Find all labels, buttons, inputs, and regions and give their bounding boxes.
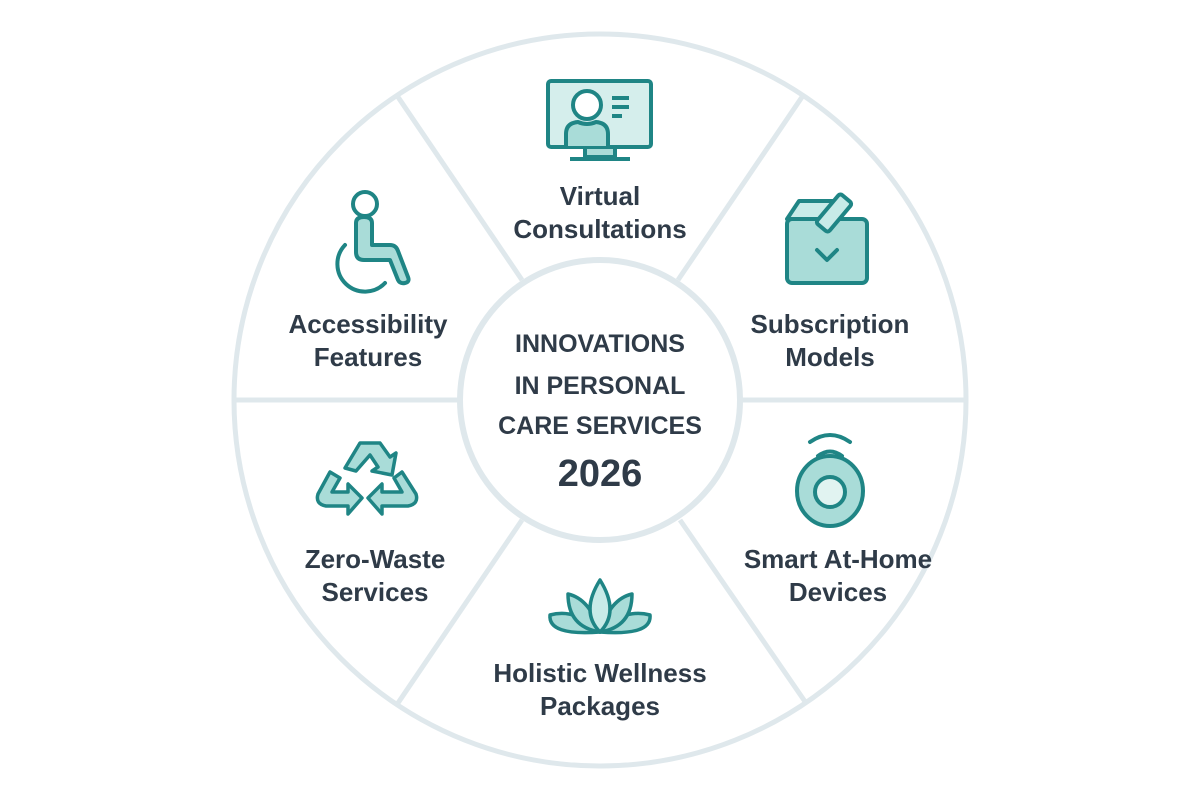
- icon: subscription box: [787, 193, 867, 283]
- icon: monitor: [548, 81, 651, 159]
- center hub: IN PERSONAL: [515, 372, 685, 400]
- label: Accessibility Features: [289, 309, 448, 372]
- center hub: 2026: [558, 453, 642, 495]
- label: Holistic Wellness Packages: Packages: [540, 691, 660, 721]
- label: Virtual Consultations: Virtual: [560, 181, 640, 211]
- label: Subscription Models: Models: [785, 342, 875, 372]
- label: Subscription Models: [751, 309, 909, 372]
- label: Smart At-Home Devices: Smart At-Home: [744, 544, 932, 574]
- center hub: [460, 260, 740, 540]
- label: Holistic Wellness Packages: Holistic Wellness: [493, 658, 707, 688]
- center hub: INNOVATIONS: [515, 330, 685, 358]
- label: Zero-Waste Services: Services: [322, 577, 428, 607]
- label: Zero-Waste Services: [305, 544, 445, 607]
- label: Zero-Waste Services: Zero-Waste: [305, 544, 445, 574]
- icon: wheelchair: [337, 192, 409, 292]
- label: Virtual Consultations: Consultations: [513, 214, 687, 244]
- label: Accessibility Features: Accessibility: [289, 309, 448, 339]
- label: Smart At-Home Devices: Devices: [789, 577, 887, 607]
- label: Subscription Models: Subscription: [751, 309, 909, 339]
- label: Holistic Wellness Packages: [493, 658, 707, 721]
- icon: smart device: [797, 435, 863, 526]
- center hub: CARE SERVICES: [498, 412, 702, 440]
- label: Accessibility Features: Features: [314, 342, 422, 372]
- icon: lotus: [550, 580, 650, 633]
- label: Smart At-Home Devices: [744, 544, 932, 607]
- label: Virtual Consultations: [513, 181, 687, 244]
- icon: recycle: [317, 443, 417, 514]
